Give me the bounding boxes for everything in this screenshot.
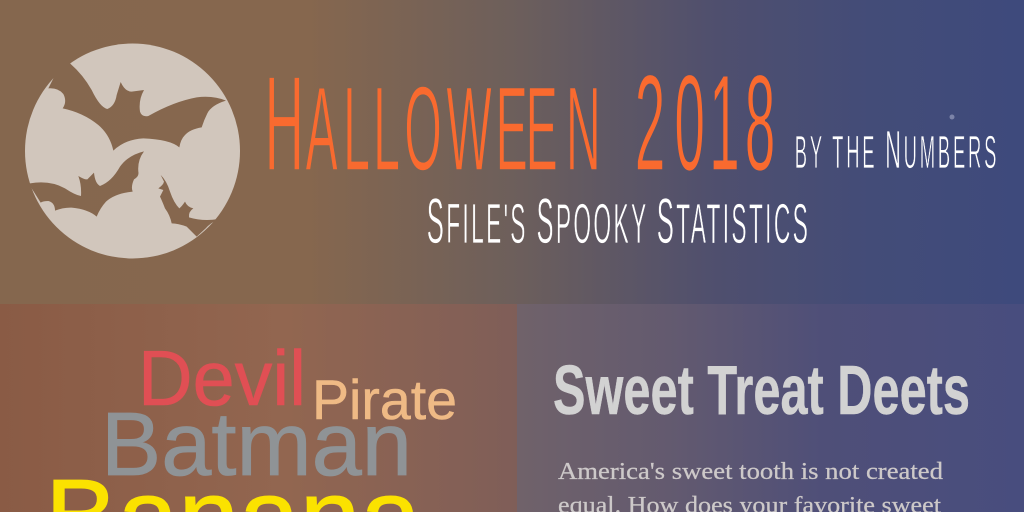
subtitle: by the Numbers: BY THE NUMBERS <box>795 119 999 180</box>
title: Halloween 2018: ALLOWEEN <box>306 62 601 196</box>
star glint <box>950 114 954 120</box>
title: Halloween 2018 <box>265 48 775 200</box>
word: Batman: Batman <box>101 395 412 495</box>
panel: sweet treat deets <box>517 304 1024 512</box>
title: Halloween 2018: H <box>265 48 304 199</box>
icon: moon with bats <box>25 44 240 258</box>
panel: word cloud <box>0 304 517 512</box>
body text: America's sweet tooth is not created <box>558 459 943 485</box>
header background <box>0 0 1024 304</box>
word: Devil: Devil <box>138 334 306 422</box>
word: Pirate: Pirate <box>312 368 457 431</box>
body text <box>558 459 943 512</box>
title: Halloween 2018: 2018 <box>635 48 775 200</box>
subtitle: Sfile's Spooky Statistics: SFILE'S SPOOKY STATISTICS <box>427 187 810 257</box>
